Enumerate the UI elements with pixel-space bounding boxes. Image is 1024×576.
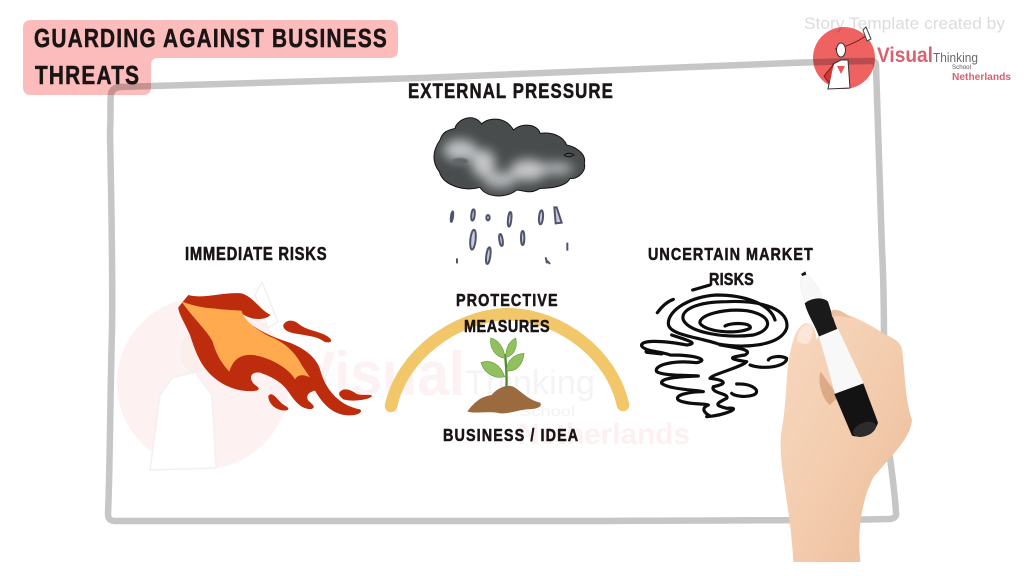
label: business / idea: BUSINESS / IDEA [443,426,578,445]
heading: immediate risks: IMMEDIATE RISKS [185,243,327,264]
title: THREATS [35,61,139,90]
credit: story template created by: Story Template created by [804,15,1006,33]
icon: seedling in soil [467,338,541,413]
soil [467,386,541,413]
flame body [178,293,361,415]
cloud [434,118,585,196]
logo: Visual Thinking School Netherlands: Thinking [933,51,978,65]
watermark: Visual Thinking School logo: School [519,403,575,419]
title: GUARDING AGAINST BUSINESS [34,24,387,53]
heading: protective measures: PROTECTIVE [456,291,558,310]
hand [781,312,912,562]
icon: fire [178,293,372,415]
icon: protective arch [391,314,623,406]
leaves [481,338,524,377]
index fingertip [831,310,852,318]
watermark: Visual Thinking School logo [117,282,690,470]
watermark: Visual Thinking School logo: Netherlands [518,418,690,451]
palm shadow [819,372,838,405]
whiteboard frame [108,61,896,522]
heading: uncertain market risks [648,245,813,289]
flame core [182,302,310,379]
watermark: Visual Thinking School logo: Visual [297,340,465,409]
logo: Visual Thinking School Netherlands: School [952,65,971,71]
title [23,20,398,95]
watermark: Visual Thinking School logo: Thinking [465,364,595,402]
logo: Visual Thinking School Netherlands: Visual [877,44,933,67]
heading: uncertain market risks: RISKS [709,270,754,289]
icon: tornado [642,285,787,417]
stem [505,354,507,388]
heading: protective measures [456,291,558,336]
logo: Visual Thinking School Netherlands [813,27,1011,89]
heading: protective measures: MEASURES [464,317,550,336]
sparks [283,321,331,342]
heading: uncertain market risks: UNCERTAIN MARKET [648,245,813,264]
logo circle and figure [813,27,875,89]
icon: storm cloud with rain [434,118,585,264]
marker [800,271,878,440]
heading: external pressure: EXTERNAL PRESSURE [408,80,613,104]
rain drops [450,207,567,264]
logo: Visual Thinking School Netherlands: Netherlands [952,71,1011,83]
hand holding marker [781,271,912,562]
thumb nail [797,324,813,344]
